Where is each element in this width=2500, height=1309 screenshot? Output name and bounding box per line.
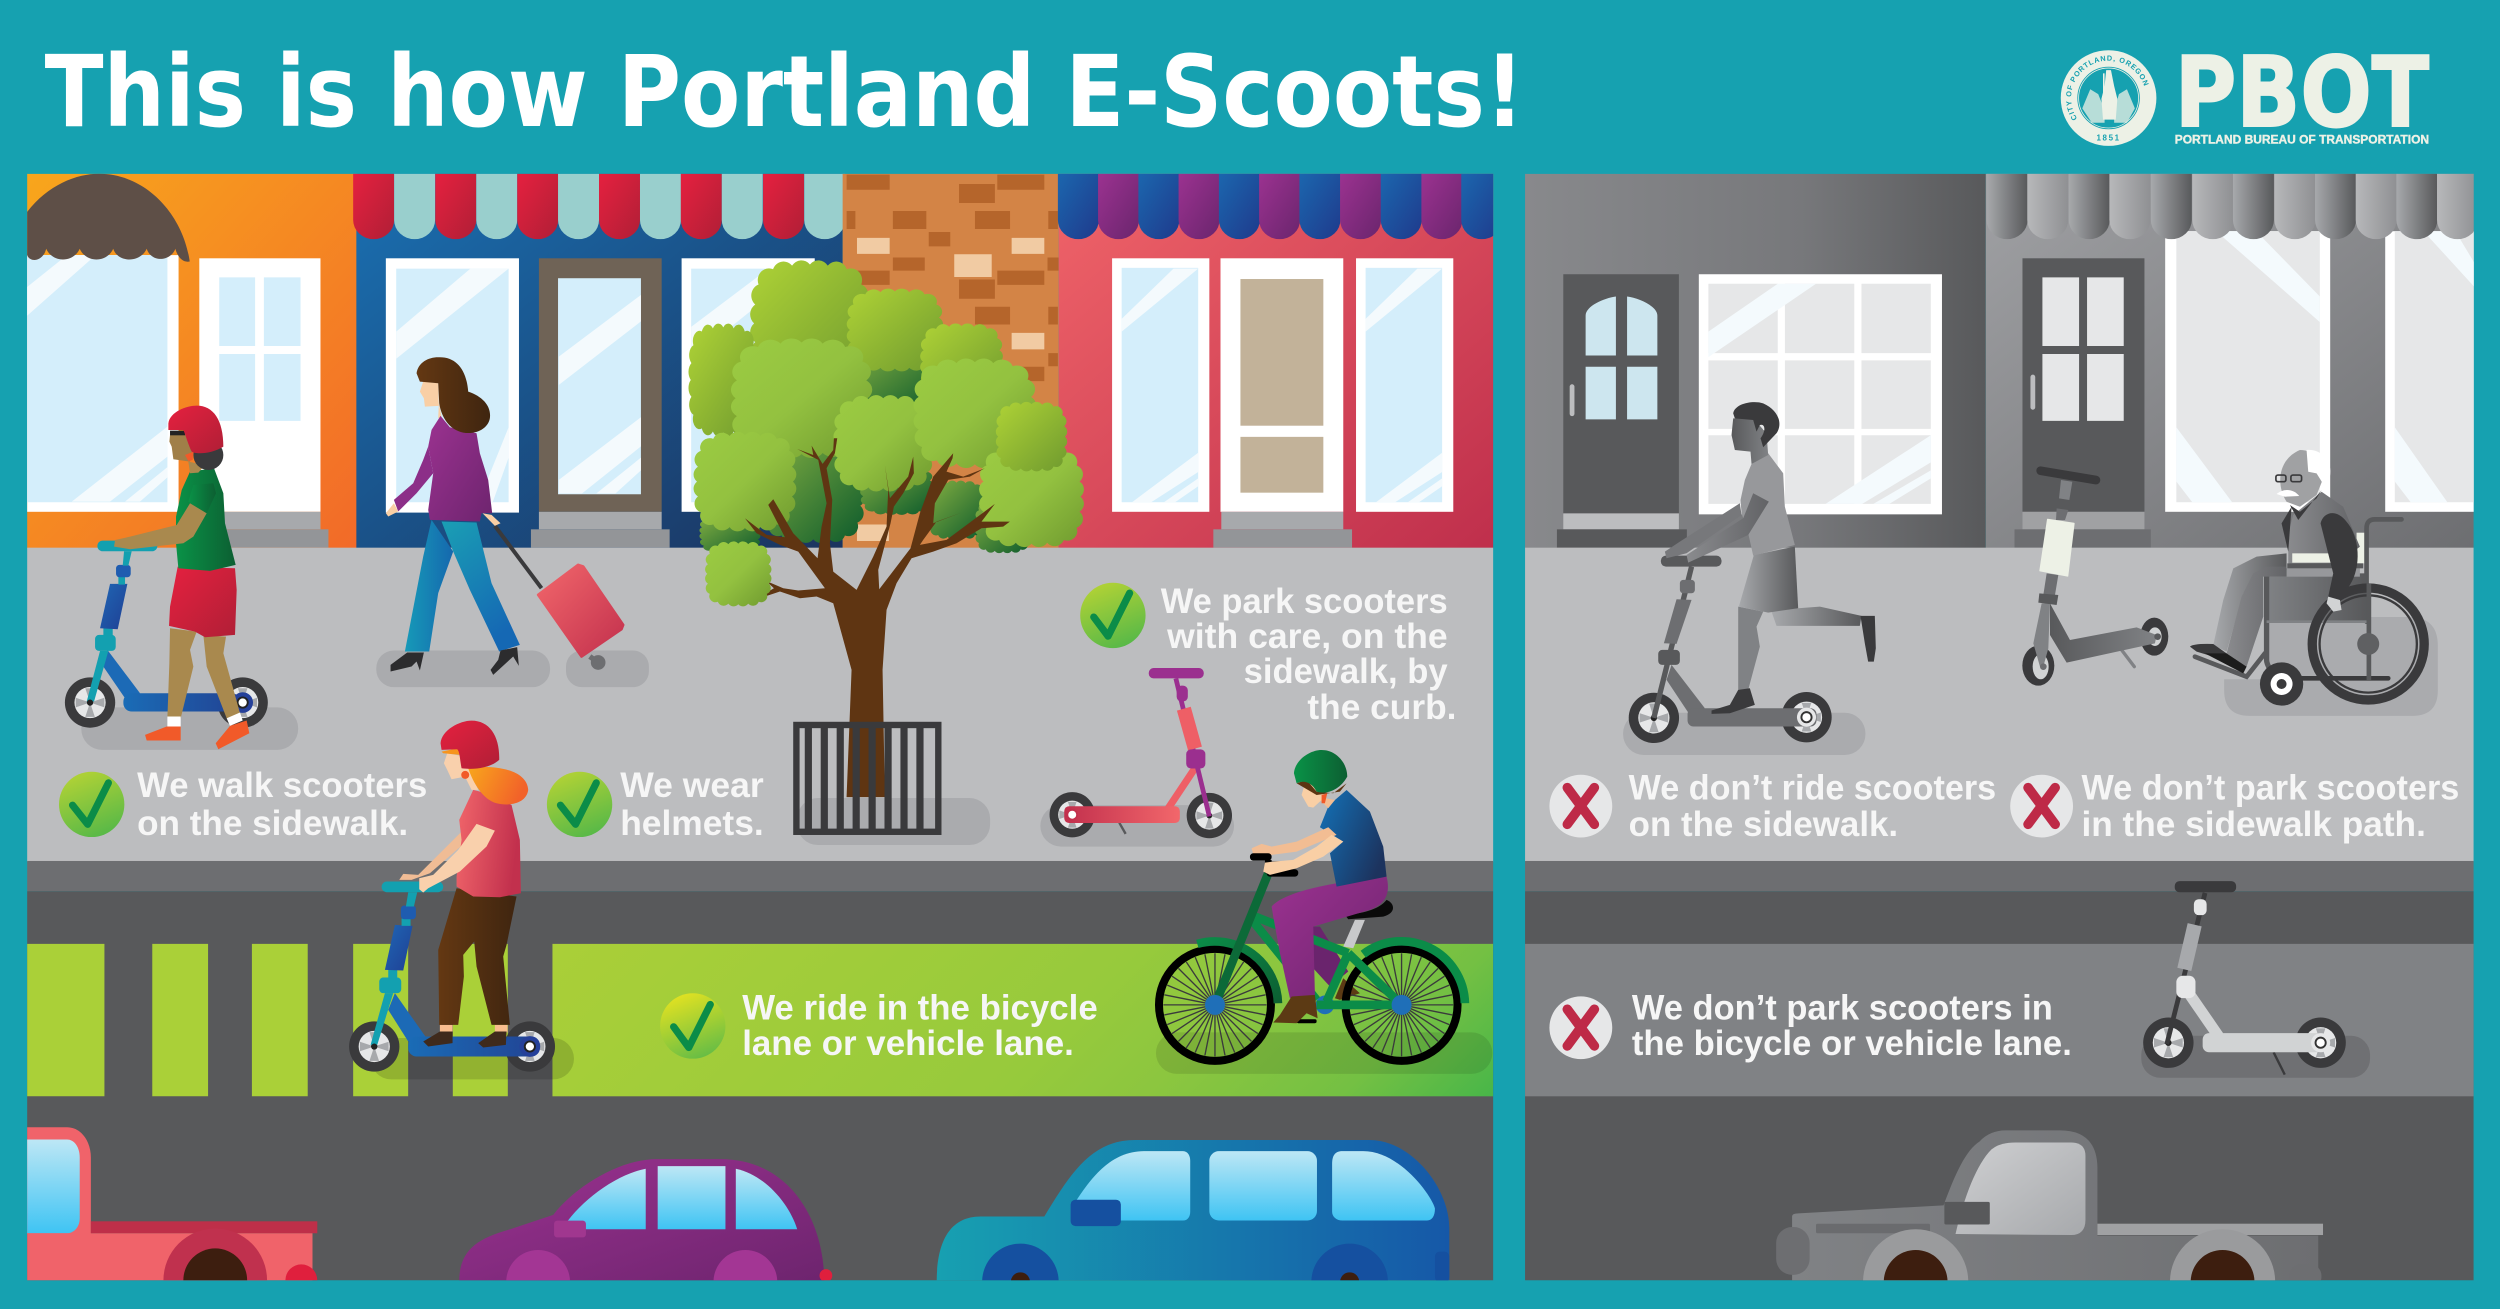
- text: on the sidewalk.: [1629, 805, 1898, 844]
- parked scooter and wheelchair user group: [2022, 450, 2424, 706]
- vehicle: purple car: [459, 1159, 832, 1280]
- panel: what we don't do (right street scene, grayscale): [1525, 174, 2478, 1309]
- text: sidewalk, by: [1244, 652, 1448, 691]
- tree foliage: low cluster: [705, 541, 771, 606]
- sidewalk: [1525, 548, 2474, 862]
- icon: city of Portland seal: CITY OF PORTLAND, OREGON: [2066, 56, 2149, 120]
- callout: don't park in sidewalk path: [2010, 769, 2459, 844]
- ground shadows: [1623, 617, 2438, 1078]
- bicycle with rider: [1159, 750, 1465, 1061]
- tree foliage: dark back layer: [699, 350, 1031, 553]
- brick wall: [843, 174, 1059, 548]
- icon: X: [1549, 775, 1612, 838]
- awning: blue and purple stripes: [1058, 174, 1502, 239]
- gray building with door and window: [1525, 174, 1986, 548]
- icon: city of Portland seal: [2060, 50, 2156, 146]
- person: walking a scooter with helmet: [114, 406, 249, 749]
- vehicle: gray pickup truck: [1776, 1130, 2323, 1309]
- tree foliage: front layer: [694, 339, 1084, 547]
- curb: [1525, 861, 2474, 891]
- person: riding scooter on lane: [349, 721, 555, 1072]
- scooter: walked (blue): [65, 541, 268, 728]
- title: This is how Portland E-Scoots!: [45, 35, 1524, 150]
- blue storefront: [356, 174, 843, 548]
- callout: park with care: [1080, 582, 1456, 727]
- person: woman with rolling suitcase: [386, 357, 623, 675]
- icon: check: [660, 993, 725, 1059]
- rider scooter: [349, 882, 555, 1072]
- awning: brown: [27, 174, 190, 262]
- scooter: parked in bicycle lane: [2143, 881, 2346, 1075]
- text: We don’t park scooters: [2081, 769, 2459, 808]
- orange storefront: [27, 174, 357, 548]
- tree: [688, 260, 1084, 797]
- bicycle lane: [1525, 944, 2474, 1096]
- text: in the sidewalk path.: [2081, 805, 2426, 844]
- tree grate: [796, 725, 938, 832]
- person: riding scooter on sidewalk: [1629, 402, 1876, 743]
- cyclist: [1250, 750, 1388, 1023]
- callout: ride in lane: [660, 988, 1098, 1063]
- curb: [27, 861, 1494, 891]
- icon: X: [1549, 996, 1612, 1059]
- bicycle: [1159, 873, 1465, 1061]
- text: helmets.: [620, 804, 764, 843]
- person: man in wheelchair: [2190, 450, 2424, 706]
- tree foliage: back layer: [688, 260, 1003, 436]
- rider: [399, 721, 528, 1047]
- wordmark: PBOT: [2175, 36, 2429, 149]
- text: We don’t park scooters in: [1632, 988, 2053, 1027]
- road: [1525, 891, 2474, 1282]
- icon: check: [547, 772, 612, 837]
- awning: gray stripes: [1987, 174, 2478, 239]
- sidewalk: [27, 548, 1494, 862]
- gray scooter: [1629, 556, 1832, 743]
- icon: X: [2010, 775, 2073, 838]
- text: the curb.: [1307, 688, 1456, 727]
- road: [27, 891, 1494, 1282]
- ground shadows: [81, 651, 1492, 1079]
- scooter: parked in sidewalk path: [2022, 471, 2168, 686]
- boy: [1665, 402, 1876, 714]
- gray building with door and windows: [1986, 174, 2474, 548]
- text: lane or vehicle lane.: [742, 1024, 1074, 1063]
- panel: what we do (left street scene): [27, 174, 1502, 1309]
- callout: don't park in lane: [1549, 988, 2072, 1063]
- logo: PBOT: [2060, 36, 2430, 149]
- text: We ride in the bicycle: [742, 988, 1098, 1027]
- vehicle: red pickup truck: [27, 1127, 318, 1280]
- text: the bicycle or vehicle lane.: [1632, 1024, 2072, 1063]
- wordmark subtitle: PORTLAND BUREAU OF TRANSPORTATION: [2175, 132, 2429, 146]
- text: on the sidewalk.: [137, 804, 408, 843]
- text: with care, on the: [1166, 617, 1448, 656]
- bicycle lane and crossing stripes: [27, 944, 1493, 1096]
- callout: wear helmets: [546, 772, 764, 837]
- vehicle: blue van: [936, 1140, 1450, 1280]
- text: We walk scooters: [137, 766, 427, 805]
- tree foliage: top cluster: [996, 402, 1067, 471]
- tree trunk and branches: [745, 438, 1010, 797]
- callout: walk scooters: [59, 772, 426, 837]
- icon: check: [59, 772, 124, 837]
- callout: don't ride on sidewalk: [1549, 769, 1996, 844]
- icon: check: [1080, 583, 1146, 648]
- text: We park scooters: [1161, 582, 1448, 621]
- icon: city of Portland seal: 1851: [2097, 133, 2121, 142]
- text: We don’t ride scooters: [1629, 769, 1996, 808]
- text: We wear: [620, 766, 764, 805]
- scooter: parked with care (coral): [1050, 668, 1232, 838]
- awning: red and blue stripes: [353, 174, 845, 239]
- red storefront: [1059, 174, 1494, 548]
